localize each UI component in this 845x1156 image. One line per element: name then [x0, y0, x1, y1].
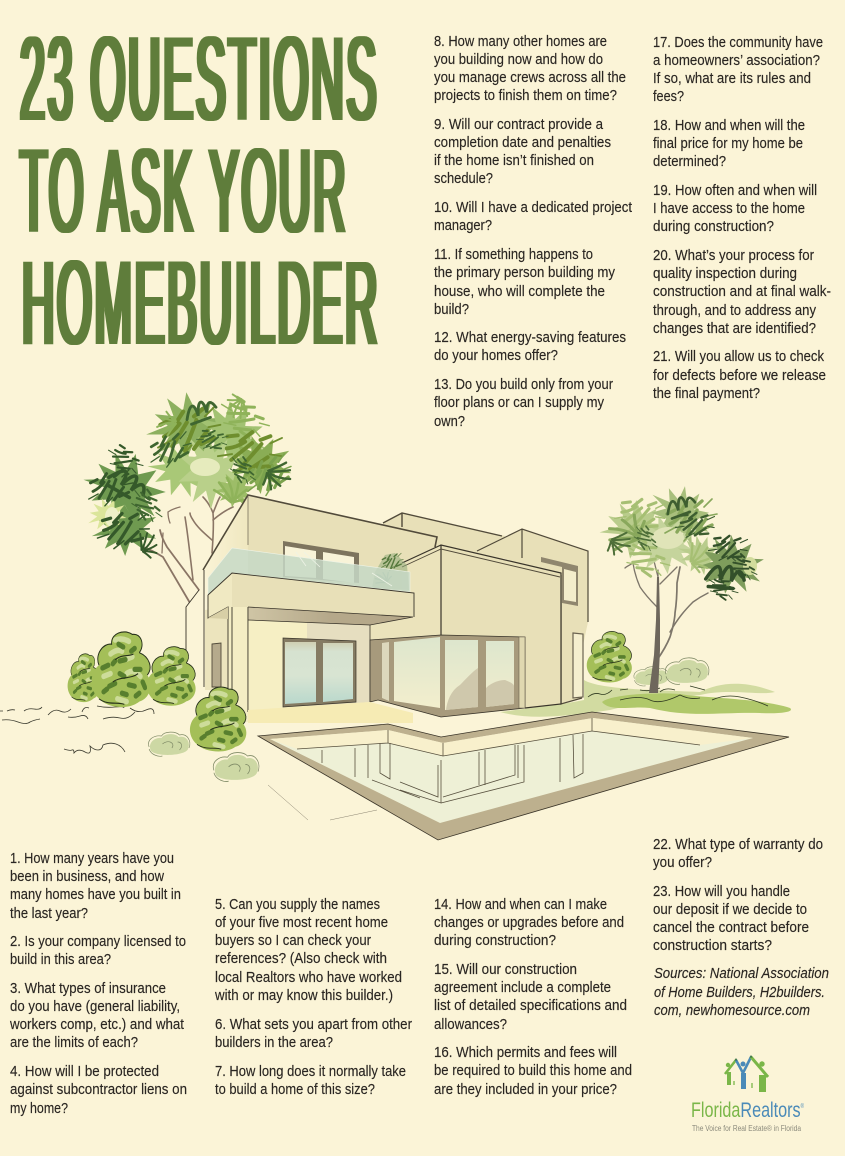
question group 5-7 — [214, 896, 412, 1098]
question 22: 22. What type of warranty do — [653, 836, 823, 853]
question 4 — [10, 1063, 187, 1117]
house illustration — [0, 385, 791, 840]
icon: upper left block — [203, 495, 437, 590]
question 14: changes or upgrades before and — [434, 914, 624, 931]
question 18: determined? — [653, 153, 726, 170]
question 10: manager? — [434, 217, 492, 234]
logo wordmark: FloridaRealtors — [691, 1099, 819, 1122]
question 9: 9. Will our contract provide a — [434, 116, 604, 133]
question group 22-23 — [653, 836, 823, 954]
question 23: cancel the contract before — [653, 919, 809, 936]
question 1 — [10, 850, 181, 922]
question 5: buyers so I can check your — [215, 932, 371, 949]
question 11: build? — [434, 301, 469, 318]
question 2: 2. Is your company licensed to — [10, 933, 186, 950]
question 6: 6. What sets you apart from other — [215, 1016, 412, 1033]
question 16: 16. Which permits and fees will — [434, 1044, 617, 1061]
question 12: 12. What energy-saving features — [434, 329, 626, 346]
icon: ground floor window — [283, 638, 356, 707]
question 18 — [653, 117, 805, 170]
question 17 — [653, 34, 823, 105]
question 1: been in business, and how — [10, 868, 164, 885]
icon: soffit — [248, 607, 413, 625]
question 15: agreement include a complete — [434, 979, 611, 996]
icon: left tree — [74, 385, 295, 603]
question 5: local Realtors who have worked — [215, 969, 402, 986]
question 18: final price for my home be — [653, 135, 803, 152]
question 8: projects to finish them on time? — [434, 87, 617, 104]
question 11: house, who will complete the — [434, 283, 605, 300]
sources note — [654, 965, 829, 1019]
question 9: if the home isn’t finished on — [434, 152, 594, 169]
icon: front right block — [370, 545, 561, 708]
question 7: 7. How long does it normally take — [215, 1063, 406, 1080]
icon: narrow right window — [573, 633, 583, 698]
question group 14-16 — [434, 896, 632, 1098]
question 1: many homes have you built in — [10, 886, 181, 903]
question 13: own? — [434, 413, 465, 430]
icon: bushes left group — [68, 632, 246, 752]
question 10: 10. Will I have a dedicated project — [434, 199, 633, 216]
question 15 — [434, 961, 627, 1033]
question 19: 19. How often and when will — [653, 182, 817, 199]
logo wordmark: ® — [801, 1103, 804, 1110]
question 16 — [434, 1044, 632, 1098]
icon: lower wall with window — [248, 607, 413, 712]
question 21 — [653, 348, 826, 402]
question 20: quality inspection during — [653, 265, 797, 282]
icon: back blocks — [383, 513, 588, 704]
question 22: you offer? — [653, 854, 712, 871]
icon: terrace floor — [248, 702, 413, 723]
question 7: to build a home of this size? — [215, 1081, 375, 1098]
icon: corner glass doors — [370, 635, 525, 717]
sources note: com, newhomesource.com — [654, 1002, 810, 1019]
question 19: during construction? — [653, 218, 774, 235]
question 22 — [653, 836, 823, 871]
question 23 — [653, 883, 809, 954]
question 21: 21. Will you allow us to check — [653, 348, 824, 365]
Florida Realtors logo — [691, 1055, 804, 1133]
question 16: be required to build this home and — [434, 1062, 632, 1079]
question 23: 23. How will you handle — [653, 883, 790, 900]
question 17: If so, what are its rules and — [653, 70, 811, 87]
question 18: 18. How and when will the — [653, 117, 805, 134]
title — [18, 36, 378, 345]
question 17: fees? — [653, 88, 684, 105]
question 9 — [434, 116, 611, 187]
icon: bush right — [587, 632, 632, 683]
question 19: I have access to the home — [653, 200, 805, 217]
question 15: allowances? — [434, 1016, 507, 1033]
question 1: the last year? — [10, 905, 88, 922]
question group 17-21 — [653, 34, 831, 402]
question 5: with or may know this builder.) — [214, 987, 393, 1004]
question 4: 4. How will I be protected — [10, 1063, 159, 1080]
logo tagline: The Voice for Real Estate® in Florida — [692, 1124, 801, 1133]
question 3: do you have (general liability, — [10, 998, 180, 1015]
question 23: construction starts? — [653, 937, 772, 954]
question group 8-13 — [434, 33, 633, 430]
question 2 — [10, 933, 186, 968]
question 3: workers comp, etc.) and what — [9, 1016, 185, 1033]
icon: right tree trunk — [649, 577, 660, 693]
question 5 — [214, 896, 402, 1004]
question 9: schedule? — [434, 170, 493, 187]
question 4: my home? — [10, 1100, 68, 1117]
icon: pale shrubs — [149, 658, 709, 781]
icon: right tree — [595, 474, 772, 660]
question 20 — [653, 247, 831, 337]
question 9: completion date and penalties — [434, 134, 611, 151]
question 13: floor plans or can I supply my — [434, 394, 604, 411]
question 8: you manage crews across all the — [434, 69, 626, 86]
question 17: a homeowners’ association? — [653, 52, 820, 69]
question 12 — [434, 329, 626, 364]
question 7 — [215, 1063, 406, 1098]
question 20: through, and to address any — [653, 302, 816, 319]
question 3: 3. What types of insurance — [10, 980, 166, 997]
icon: upper right window — [541, 557, 578, 606]
question 11 — [434, 246, 615, 318]
question 5: 5. Can you supply the names — [215, 896, 380, 913]
question 5: references? (Also check with — [215, 950, 387, 967]
question 14: 14. How and when can I make — [434, 896, 607, 913]
question 6 — [215, 1016, 412, 1051]
question 8: 8. How many other homes are — [434, 33, 607, 50]
question 23: our deposit if we decide to — [653, 901, 807, 918]
question 5: of your five most recent home — [215, 914, 388, 931]
icon: pool — [258, 712, 789, 840]
question 8: you building now and how do — [434, 51, 603, 68]
icon: balcony plant — [372, 553, 409, 590]
question 12: do your homes offer? — [434, 347, 558, 364]
question 21: for defects before we release — [653, 367, 826, 384]
question 15: 15. Will our construction — [434, 961, 577, 978]
question 4: against subcontractor liens on — [10, 1081, 187, 1098]
question 13 — [434, 376, 613, 430]
icon: upper window — [283, 541, 359, 583]
question 14 — [434, 896, 624, 949]
icon: balcony glass and slab — [208, 548, 414, 619]
question 3: are the limits of each? — [10, 1034, 138, 1051]
question 14: during construction? — [434, 932, 556, 949]
question 3 — [9, 980, 185, 1051]
question 13: 13. Do you build only from your — [434, 376, 613, 393]
question 1: 1. How many years have you — [10, 850, 174, 867]
icon: houses and people — [725, 1055, 768, 1092]
question 10 — [434, 199, 633, 234]
question 20: construction and at final walk- — [653, 283, 831, 300]
question 21: the final payment? — [653, 385, 760, 402]
icon: side door — [212, 643, 221, 687]
icon: left wall and column — [186, 570, 248, 722]
question 20: changes that are identified? — [653, 320, 816, 337]
question 20: 20. What’s your process for — [653, 247, 814, 264]
question 2: build in this area? — [10, 951, 111, 968]
question 19 — [653, 182, 817, 235]
question group 1-4 — [9, 850, 187, 1117]
question 6: builders in the area? — [215, 1034, 333, 1051]
question 8 — [434, 33, 626, 104]
question 15: list of detailed specifications and — [434, 997, 627, 1014]
question 11: 11. If something happens to — [434, 246, 593, 263]
question 11: the primary person building my — [434, 264, 615, 281]
question 16: are they included in your price? — [434, 1081, 617, 1098]
icon: ground grass — [0, 680, 791, 753]
